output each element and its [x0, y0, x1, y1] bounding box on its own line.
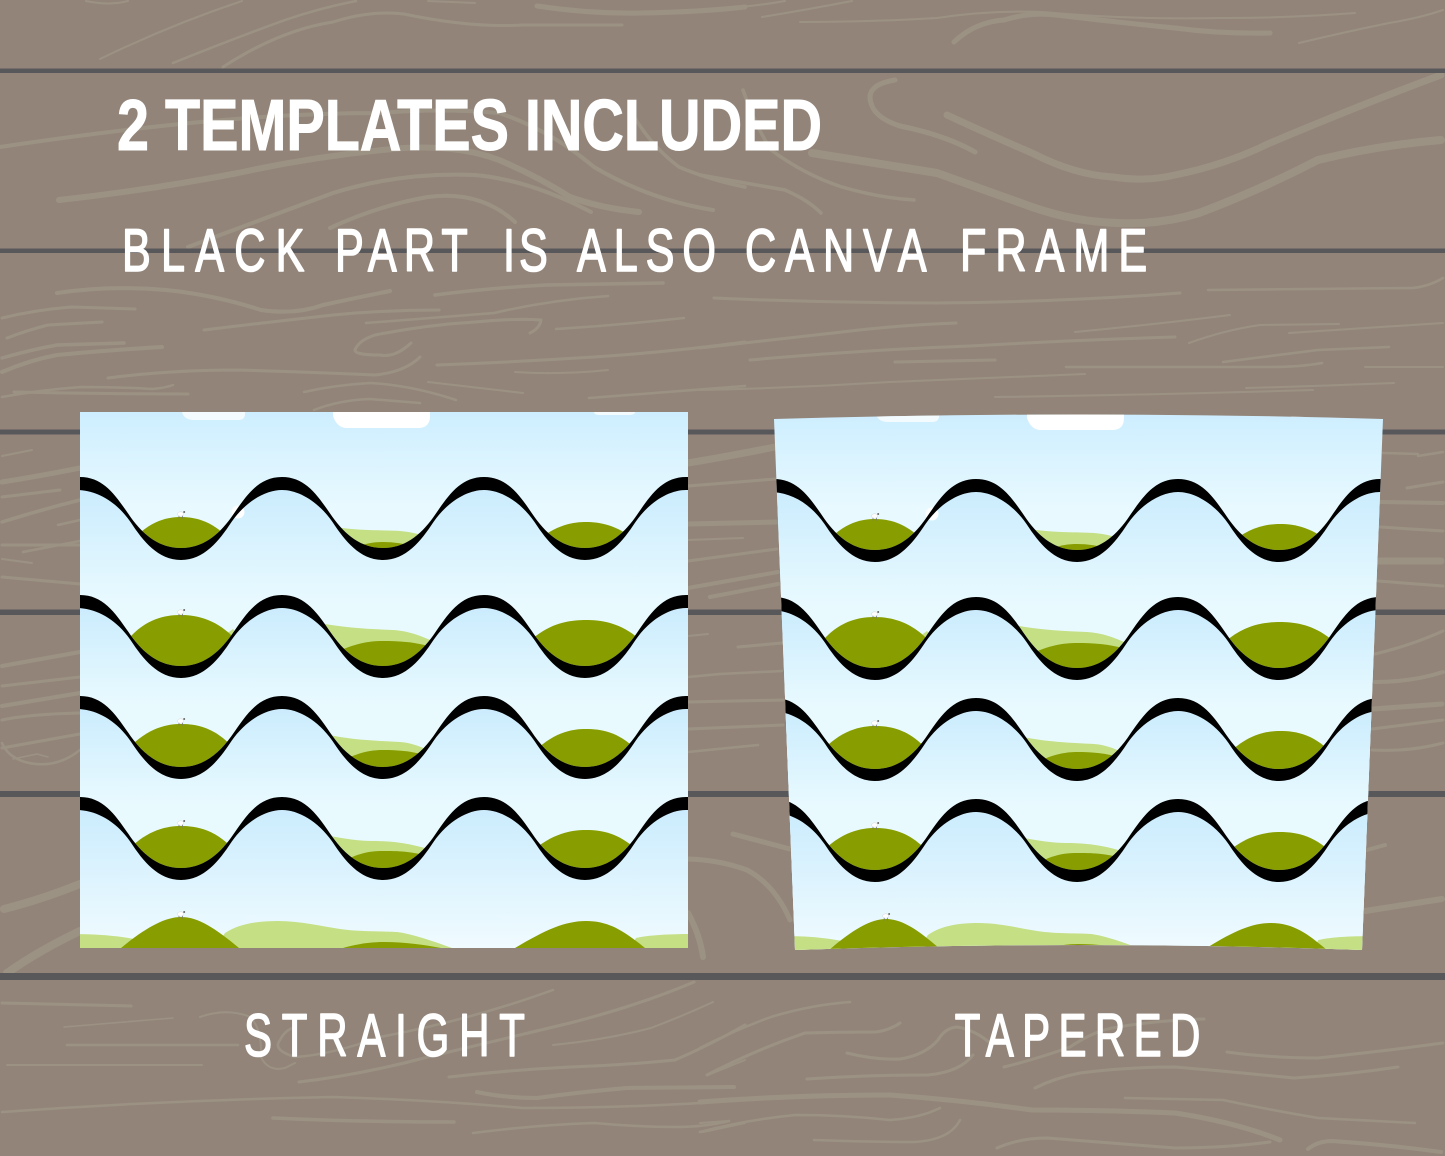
label: tapered: TAPERED — [955, 1002, 1209, 1069]
subtitle: CANVA — [745, 218, 936, 285]
ground hills — [794, 913, 1362, 950]
wave row 3 — [785, 698, 1372, 781]
wave row 1 — [770, 479, 1386, 569]
subtitle: BLACK — [122, 218, 315, 285]
panel: straight template — [80, 412, 688, 948]
sky and clouds — [774, 414, 1383, 950]
subtitle: PART — [335, 218, 475, 285]
title: 2 TEMPLATES INCLUDED — [117, 86, 822, 166]
wave row 4 — [789, 799, 1368, 882]
subtitle: FRAME — [960, 218, 1156, 285]
label: straight: STRAIGHT — [244, 1002, 535, 1069]
wave row 2 — [76, 595, 692, 685]
wave row 4 — [76, 797, 692, 887]
wave row 1 — [76, 477, 692, 567]
ground hills — [80, 911, 688, 948]
subtitle: ALSO — [577, 218, 724, 285]
wave row 3 — [76, 696, 692, 786]
wave row 2 — [781, 597, 1376, 680]
panel: tapered template — [774, 414, 1383, 950]
sky and clouds — [80, 412, 688, 948]
subtitle: IS — [503, 218, 552, 285]
